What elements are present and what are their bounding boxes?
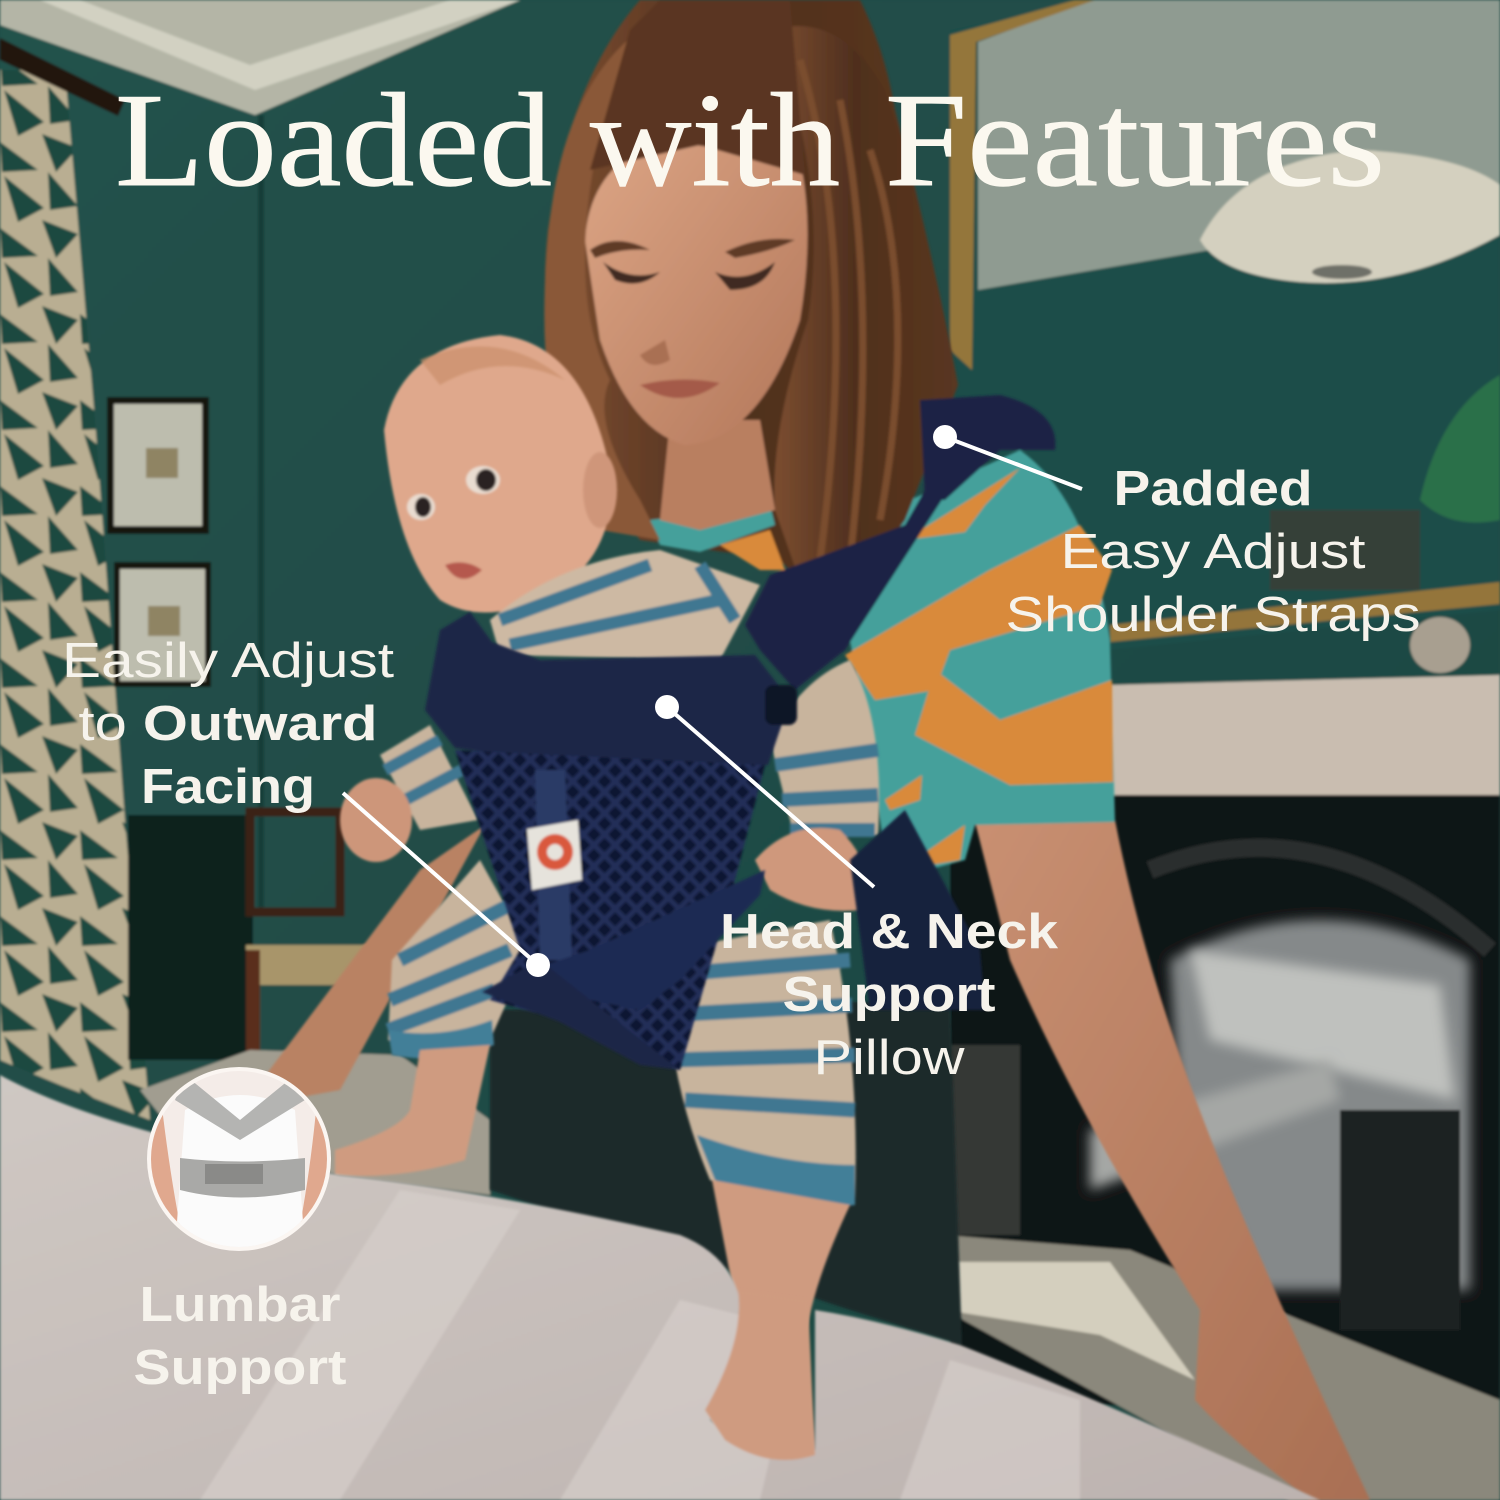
- callout: head and neck support: [655, 695, 1059, 1085]
- mantel: [1110, 675, 1500, 800]
- pointer line: [343, 793, 550, 977]
- label text: [720, 905, 1059, 1085]
- lower legs and feet: [335, 1045, 490, 1176]
- floor: right side: [945, 1235, 1500, 1500]
- foot over bed: [705, 1290, 815, 1460]
- arms: [380, 725, 478, 830]
- head: [384, 335, 611, 612]
- pointer line: [933, 425, 1082, 489]
- hair back: [545, 0, 958, 615]
- gilded mirror: [950, 0, 1500, 673]
- pointer line: [655, 695, 874, 887]
- label text: Lumbar: [140, 1278, 340, 1332]
- framed pictures: [107, 397, 211, 687]
- icon: lumbar photo circle: [147, 1067, 331, 1251]
- shoulder strap: [920, 395, 1055, 500]
- bed: [0, 1075, 1320, 1500]
- label text: Support: [134, 1341, 346, 1395]
- label text: Shoulder Straps: [1006, 588, 1420, 642]
- centre strap: [535, 770, 572, 960]
- jeans: [490, 1000, 962, 1345]
- floor: [140, 1050, 490, 1195]
- label text: to Outward: [78, 697, 378, 751]
- title: with: [590, 66, 840, 214]
- sweater chest: [490, 550, 760, 660]
- callout: outward facing: [62, 634, 550, 977]
- title: Loaded: [115, 66, 552, 214]
- curtain: [0, 70, 150, 1120]
- legs: [388, 860, 530, 1050]
- baby figure: [335, 335, 879, 1460]
- label text: Easy Adjust: [1060, 525, 1366, 579]
- hair front: [544, 30, 660, 540]
- label text: [1006, 462, 1420, 642]
- fireplace: [950, 795, 1500, 1405]
- far arm: [268, 825, 485, 1100]
- radiator and chair: [128, 812, 376, 1070]
- label text: Easily Adjust: [62, 634, 394, 688]
- lumbar support inset: [134, 1067, 346, 1395]
- near arm: [972, 807, 1370, 1500]
- label text: Head & Neck: [720, 905, 1059, 959]
- label text: Facing: [141, 760, 315, 814]
- baby carrier: [425, 612, 985, 1070]
- face and neck: [660, 420, 775, 530]
- label text: Support: [782, 968, 996, 1022]
- label text: Padded: [1114, 462, 1312, 516]
- woman figure: [268, 0, 1370, 1500]
- label text: [134, 1278, 346, 1395]
- title: Features: [885, 66, 1385, 214]
- t-shirt: [850, 450, 1115, 880]
- callout: padded shoulder straps: [933, 425, 1420, 642]
- label text: Pillow: [814, 1031, 965, 1085]
- logo tag: [527, 820, 582, 890]
- label text: [62, 634, 394, 814]
- title: [115, 66, 1385, 214]
